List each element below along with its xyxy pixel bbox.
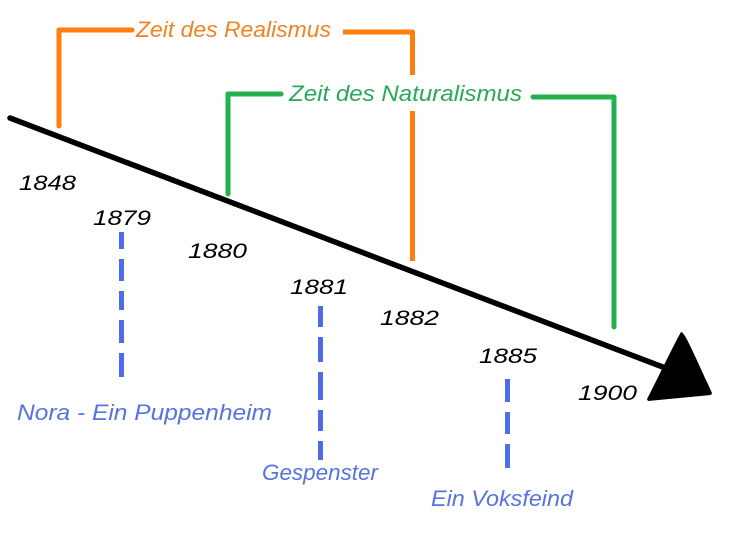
label: Zeit des Naturalismus: Zeit des Naturalismus — [288, 81, 522, 106]
work: Gespenster: Gespenster — [262, 460, 380, 485]
year labels: 1882 — [380, 307, 439, 330]
work: Nora - Ein Puppenheim: Nora - Ein Puppenheim — [17, 400, 272, 425]
timeline arrow — [10, 118, 712, 401]
year labels — [19, 172, 637, 405]
year labels: 1900 — [578, 382, 637, 405]
year labels: 1848 — [19, 172, 76, 195]
year labels: 1880 — [188, 240, 247, 263]
year labels: 1879 — [93, 207, 151, 230]
work: Ein Voksfeind: Ein Voksfeind — [431, 486, 574, 511]
year labels: 1885 — [479, 345, 537, 368]
bracket: Zeit des Naturalismus — [228, 81, 614, 327]
label: Zeit des Realismus: Zeit des Realismus — [135, 17, 331, 42]
bracket: Zeit des Realismus — [59, 17, 412, 261]
year labels: 1881 — [290, 276, 348, 299]
